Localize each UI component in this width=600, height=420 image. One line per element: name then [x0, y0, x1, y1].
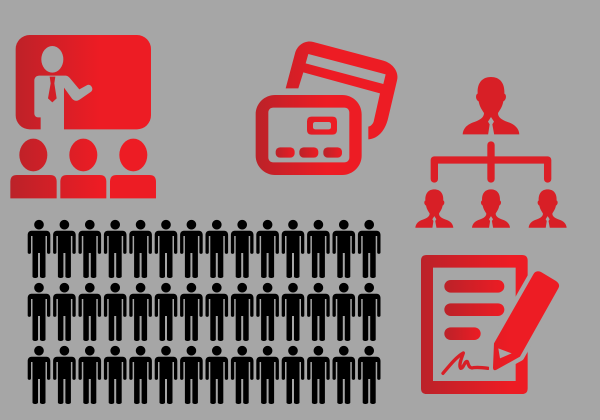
icon: signed document and pencil: [421, 255, 559, 394]
lower person right: [529, 189, 567, 228]
audience member centre: [60, 139, 106, 198]
audience member right: [110, 139, 156, 198]
crowd of people: row 2: [28, 283, 381, 341]
presentation board: [16, 35, 151, 129]
icon: presenter and audience: [10, 35, 156, 198]
text lines: [444, 280, 504, 340]
back card: [286, 42, 397, 139]
lower person left: [415, 189, 453, 228]
icon: organisation chart: [415, 77, 567, 228]
presenter: [34, 46, 92, 131]
lower person centre: [472, 189, 510, 228]
connector lines: [434, 145, 548, 179]
card chip: [307, 117, 337, 135]
front card: [256, 95, 362, 175]
icon: payment cards: [256, 42, 397, 175]
presenter tie: [48, 77, 57, 102]
crowd of people: row 3: [28, 346, 381, 404]
signature: [443, 353, 488, 373]
pencil tip: [498, 348, 512, 358]
audience member left: [10, 139, 57, 198]
pencil halo: [493, 271, 559, 370]
crowd of people: row 1: [28, 220, 381, 278]
top person: [463, 77, 519, 135]
card keys: [276, 147, 342, 158]
pencil: [493, 271, 559, 370]
document page: [421, 255, 528, 394]
